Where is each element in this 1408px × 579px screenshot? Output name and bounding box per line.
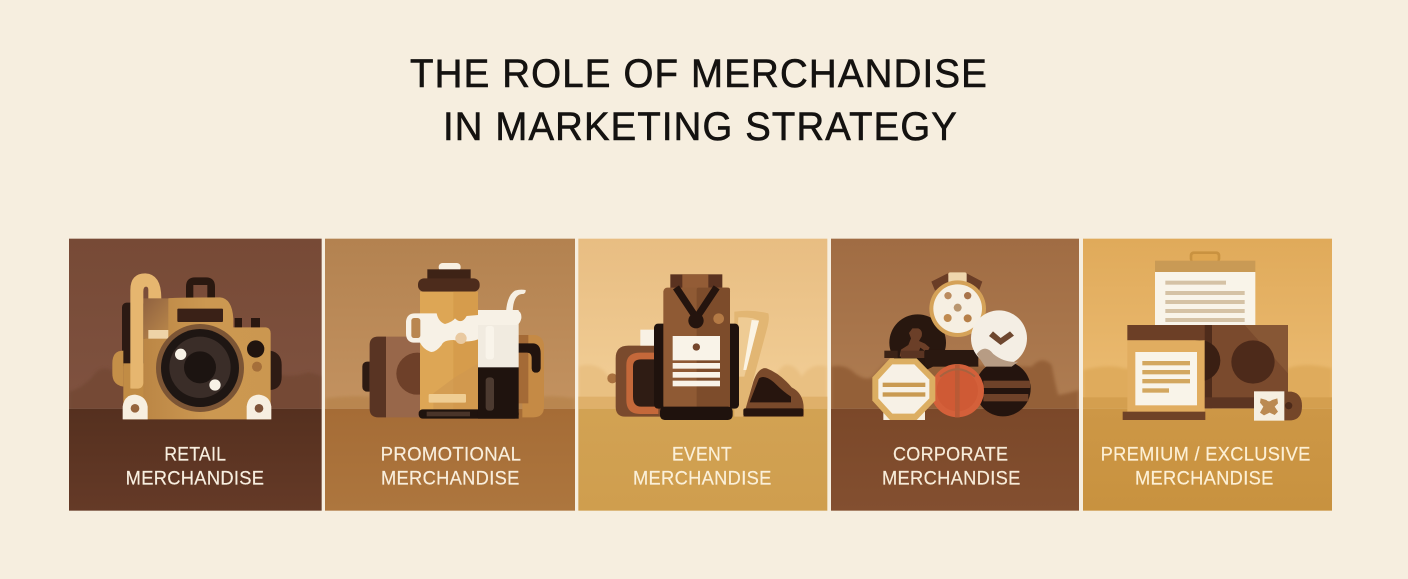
label: promotional merchandise xyxy=(381,445,521,489)
label: promotional merchandise: PROMOTIONAL xyxy=(381,445,521,466)
panel: retail merchandise xyxy=(69,239,322,511)
label: premium / exclusive merchandise: PREMIUM / EXCLUSIVE xyxy=(1101,445,1311,466)
title: IN MARKETING STRATEGY xyxy=(443,105,958,149)
panel: corporate merchandise xyxy=(831,239,1079,511)
icon: lanyard badge and bag xyxy=(607,274,804,420)
label: corporate merchandise: CORPORATE xyxy=(893,445,1008,466)
label: retail merchandise: MERCHANDISE xyxy=(126,468,264,489)
icon: medals and badges xyxy=(872,272,1031,420)
panel: event merchandise xyxy=(578,239,827,511)
label: corporate merchandise: MERCHANDISE xyxy=(882,468,1021,489)
label: retail merchandise: RETAIL xyxy=(164,445,226,466)
label: event merchandise: EVENT xyxy=(672,445,732,466)
icon: boxes and documents xyxy=(1123,251,1302,421)
label: premium / exclusive merchandise: MERCHANDISE xyxy=(1135,468,1274,489)
label: premium / exclusive merchandise xyxy=(1101,445,1311,489)
panel: promotional merchandise xyxy=(325,239,575,511)
label: event merchandise: MERCHANDISE xyxy=(633,468,772,489)
icon: camera xyxy=(112,273,282,419)
icon: flask and mug xyxy=(362,263,544,419)
label: retail merchandise xyxy=(126,445,264,489)
label: event merchandise xyxy=(633,445,772,489)
panel: premium / exclusive merchandise xyxy=(1083,239,1332,511)
label: promotional merchandise: MERCHANDISE xyxy=(381,468,520,489)
title: THE ROLE OF MERCHANDISE xyxy=(410,52,988,96)
title xyxy=(410,52,988,149)
label: corporate merchandise xyxy=(882,445,1021,489)
